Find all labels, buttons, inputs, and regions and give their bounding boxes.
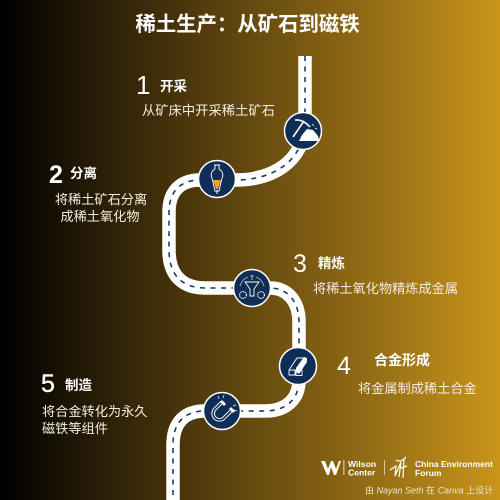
step 2 description: 成稀土氧化物: [60, 209, 140, 224]
step 3 heading: 精炼: [318, 255, 345, 271]
designer credit: 由 Nayan Seth 在 Canva 上设计: [365, 484, 493, 496]
step 5 description: 将合金转化为永久: [42, 404, 148, 419]
step 2 heading: 分离: [70, 165, 97, 181]
step 4 heading: 合金形成: [374, 352, 430, 368]
icon: horseshoe magnet: [204, 392, 240, 430]
step 1 description: 从矿床中开采稀土矿石: [142, 103, 275, 118]
logo: Wilson Center: Center: [348, 468, 376, 478]
step 3 number: 3: [293, 250, 307, 278]
icon: refining funnel and gears: [234, 270, 270, 306]
step 1 number: 1: [136, 70, 150, 100]
step 3 description: 将稀土氧化物精炼成金属: [313, 281, 458, 296]
step 4 number: 4: [337, 352, 351, 380]
step 2 number: 2: [49, 161, 63, 189]
winding road: [169, 56, 305, 500]
logo: China Environment Forum: [384, 457, 493, 478]
step 5 description: [42, 404, 148, 436]
step 5 number: 5: [41, 370, 55, 398]
logo: Wilson Center: Wilson: [348, 459, 376, 469]
logo: China Environment Forum: China Environment: [415, 459, 493, 469]
step 5 description: 磁铁等组件: [42, 420, 108, 436]
step 5 heading: 制造: [65, 377, 92, 393]
step 2 description: 将稀土矿石分离: [55, 191, 147, 207]
step 2 description: [55, 191, 147, 224]
icon: separating funnel: [198, 160, 236, 198]
icon: metal ingots: [280, 348, 316, 384]
icon: mining pick and ore: [284, 112, 322, 150]
title: 稀土生产：从矿石到磁铁: [135, 13, 360, 36]
step 1 heading: 开采: [160, 79, 187, 94]
step 4 description: 将金属制成稀土合金: [358, 381, 477, 396]
logo: China Environment Forum: Forum: [415, 468, 442, 478]
logo: Wilson Center: [321, 459, 376, 478]
